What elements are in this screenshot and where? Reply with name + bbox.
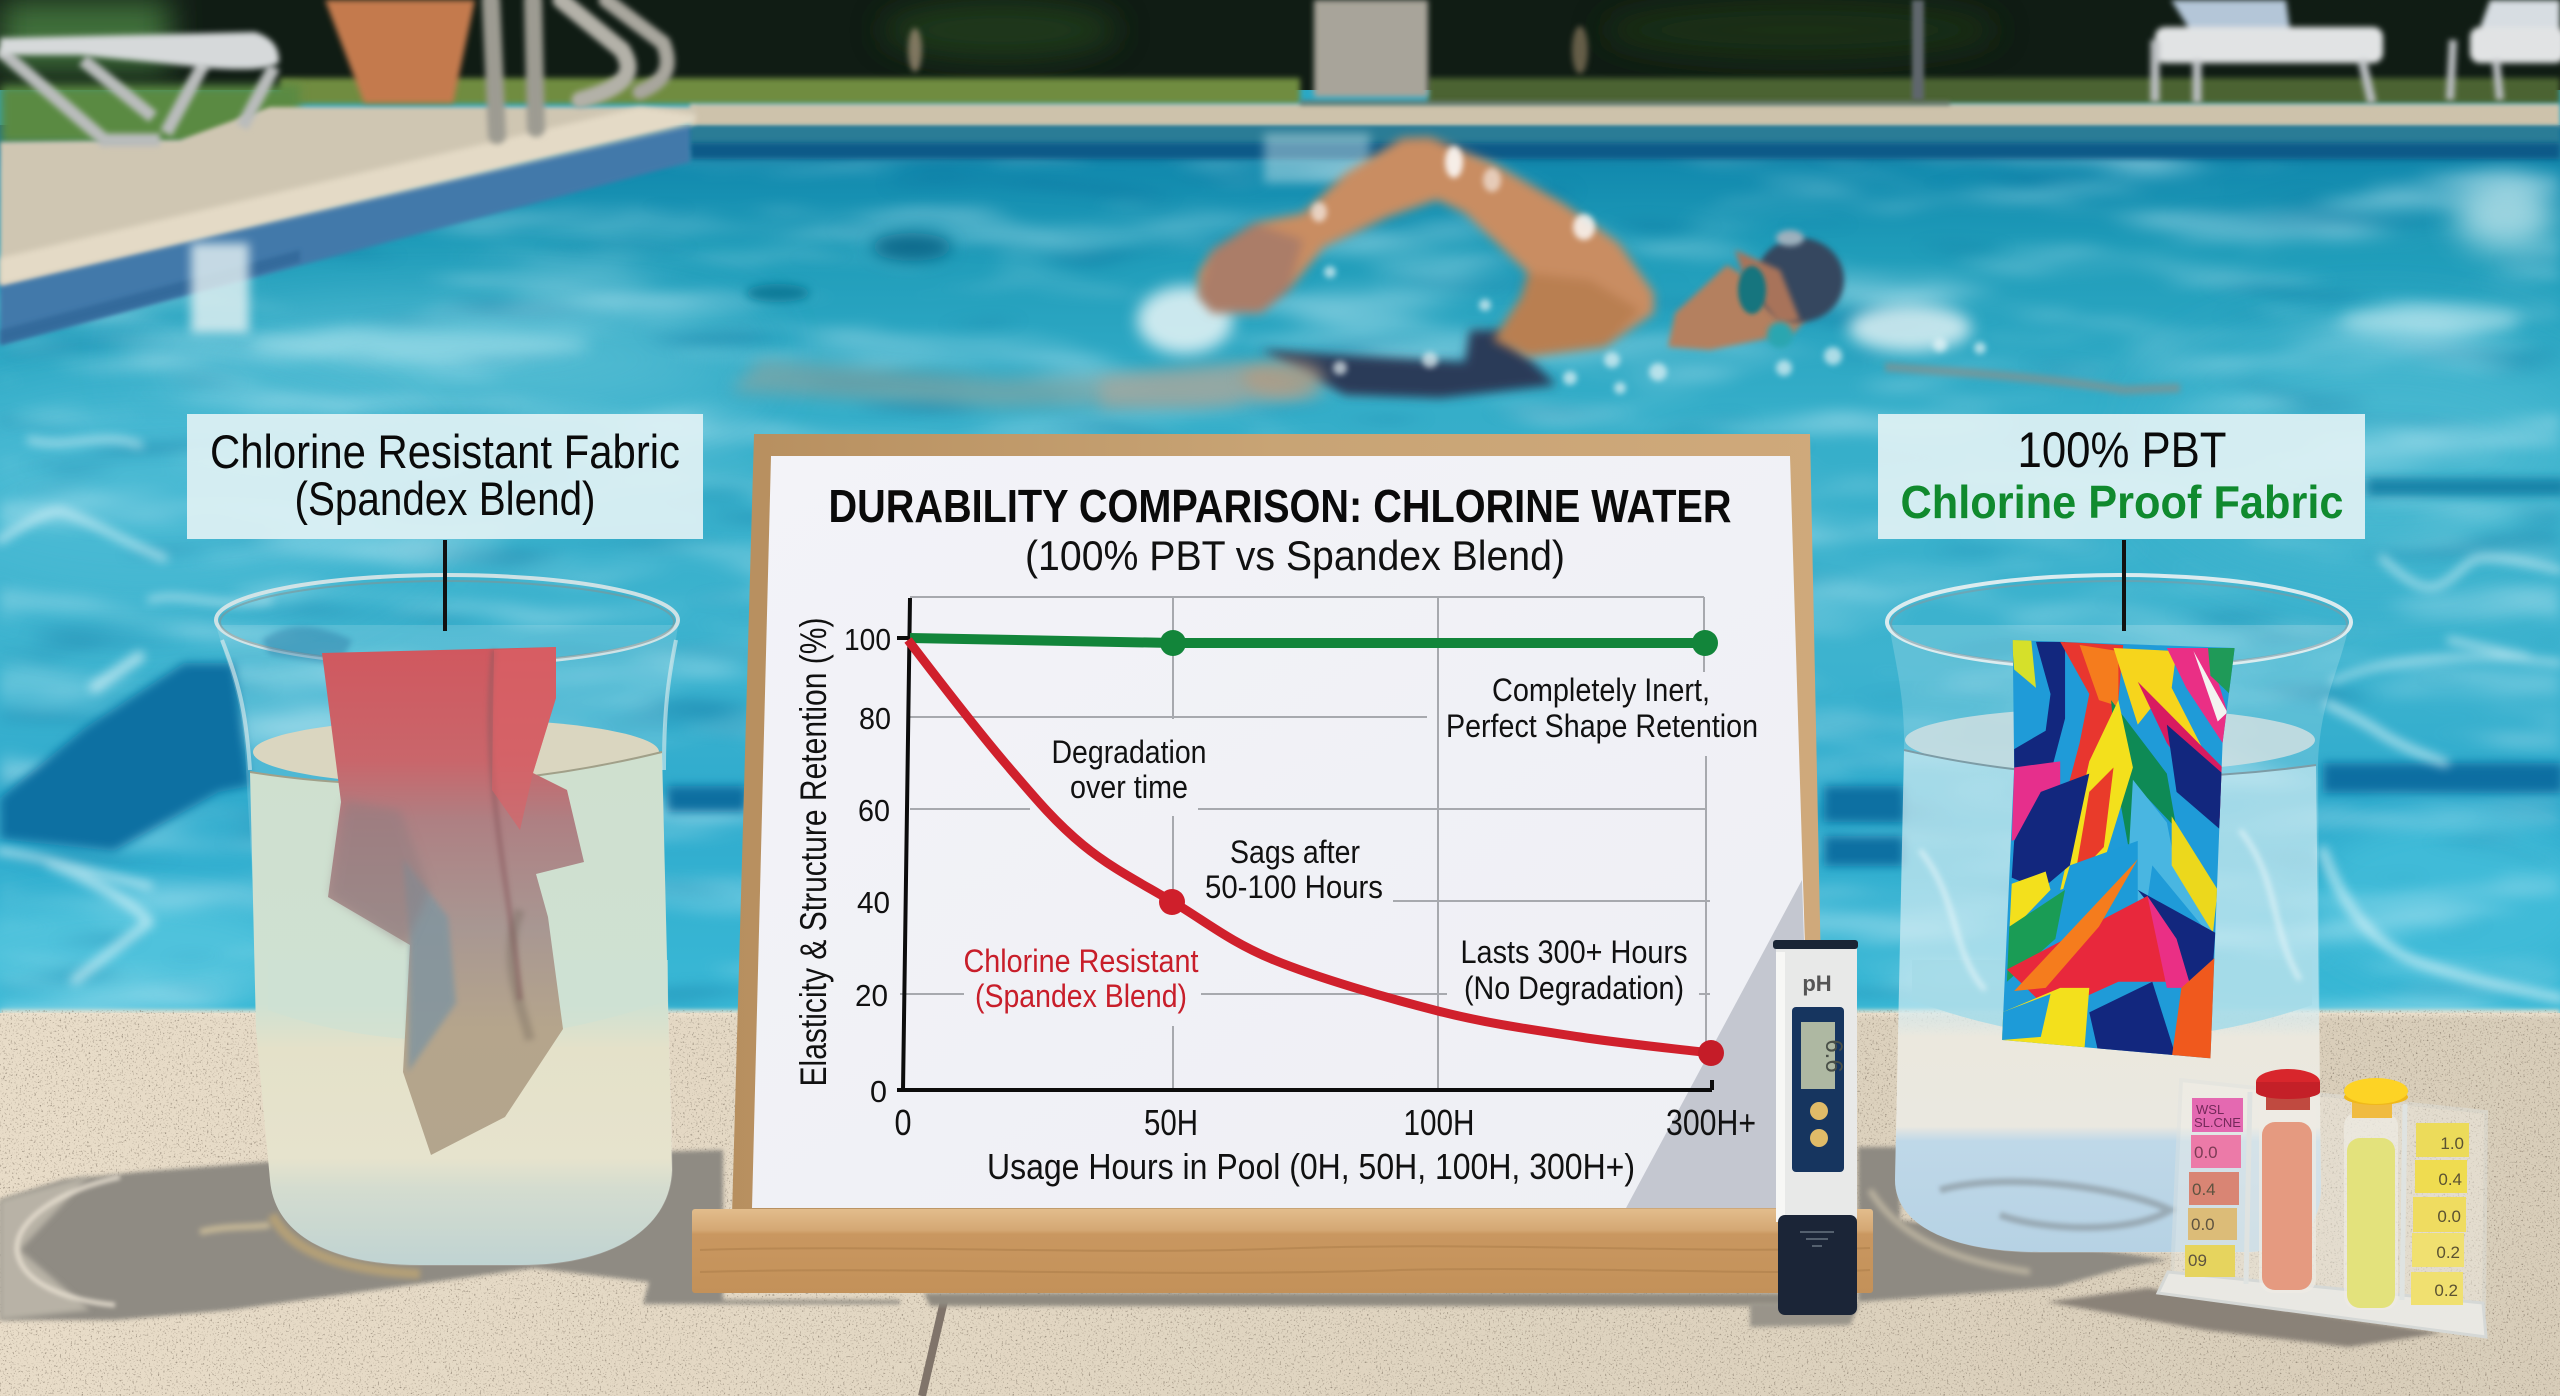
x-axis tick labels: 300H+ bbox=[1666, 1102, 1756, 1143]
callout: chlorine resistant fabric label: Chlorine Resistant Fabric bbox=[210, 425, 680, 478]
swimmer bbox=[730, 137, 2180, 408]
left beaker glass bbox=[216, 575, 678, 1266]
panel: right beaker with PBT fabric bbox=[1887, 540, 2351, 1253]
near pool deck edge and tile band bbox=[0, 107, 1370, 345]
gridlines bbox=[900, 597, 1710, 1090]
callout: chlorine resistant fabric label: (Spandex Blend) bbox=[294, 472, 596, 525]
annotation: chlorine resistant series label: Chlorine Resistant bbox=[964, 943, 1199, 979]
annotation: completely inert bbox=[1446, 672, 1758, 744]
x-axis tick labels: 100H bbox=[1404, 1102, 1474, 1143]
panel: wooden board with chart bbox=[692, 434, 1873, 1293]
wooden base bbox=[692, 1209, 1873, 1293]
annotation: lasts 300+ hours: Lasts 300+ Hours bbox=[1460, 934, 1688, 970]
callout line: left label to beaker bbox=[443, 540, 447, 631]
line chart bbox=[793, 597, 1758, 1187]
annotation: sags after 50-100 hours: Sags after bbox=[1230, 834, 1360, 870]
annotation: degradation over time bbox=[1052, 734, 1206, 805]
annotation: sags after 50-100 hours bbox=[1205, 834, 1383, 905]
x-axis tick labels: 50H bbox=[1144, 1102, 1198, 1143]
kit tray and frame bbox=[2158, 1080, 2486, 1337]
chart subtitle: (100% PBT vs Spandex Blend) bbox=[1025, 532, 1565, 579]
chart title: DURABILITY COMPARISON: CHLORINE WATER bbox=[828, 480, 1732, 532]
left colour swatches: SL.CNE bbox=[2194, 1115, 2241, 1130]
callout: 100% PBT chlorine proof fabric label: 100% PBT bbox=[2018, 422, 2226, 478]
y-axis title: Elasticity & Structure Retention (%) bbox=[793, 618, 834, 1086]
chart paper bbox=[752, 456, 1813, 1208]
right colour swatches: 0.2 bbox=[2434, 1281, 2458, 1300]
yellow reagent tube bbox=[2344, 1078, 2408, 1310]
y-axis tick labels: 40 bbox=[857, 885, 890, 920]
left colour swatches bbox=[2185, 1098, 2243, 1277]
left colour swatches: 0.0 bbox=[2194, 1143, 2218, 1162]
annotation: completely inert: Perfect Shape Retention bbox=[1446, 708, 1758, 744]
left colour swatches: 0.0 bbox=[2191, 1215, 2215, 1234]
right beaker glass bbox=[1887, 575, 2351, 1253]
y-axis tick labels bbox=[844, 622, 891, 1109]
annotation: sags after 50-100 hours: 50-100 Hours bbox=[1205, 869, 1383, 905]
x-axis tick labels bbox=[894, 1102, 1756, 1143]
y-axis tick labels: 100 bbox=[844, 622, 891, 657]
annotation: degradation over time: over time bbox=[1070, 769, 1188, 805]
axes bbox=[897, 598, 1712, 1090]
pool deck foreground bbox=[0, 1010, 2560, 1396]
right colour swatches: 1.0 bbox=[2440, 1134, 2464, 1153]
wooden frame bbox=[732, 434, 1826, 1215]
icon: faded fabric bbox=[322, 647, 584, 1155]
pool water background bbox=[0, 125, 2560, 1025]
series: chlorine resistant spandex blend bbox=[908, 640, 1724, 1066]
x-axis title: Usage Hours in Pool (0H, 50H, 100H, 300H+) bbox=[987, 1146, 1635, 1187]
annotation: chlorine resistant series label: (Spandex Blend) bbox=[975, 978, 1187, 1014]
callout: 100% PBT chlorine proof fabric label: Chlorine Proof Fabric bbox=[1900, 476, 2344, 528]
panel: left beaker with spandex blend fabric bbox=[216, 540, 678, 1266]
left colour swatches: WSL bbox=[2196, 1102, 2224, 1117]
callout line: right label to beaker bbox=[2122, 540, 2126, 631]
red reagent tube bbox=[2256, 1069, 2320, 1293]
right colour swatches: 0.0 bbox=[2437, 1207, 2461, 1226]
background garden and far pool edge bbox=[0, 0, 2560, 159]
left colour swatches: 0.4 bbox=[2192, 1180, 2216, 1199]
annotation: degradation over time: Degradation bbox=[1052, 734, 1206, 770]
y-axis tick labels: 80 bbox=[859, 701, 891, 736]
right colour swatches: 0.4 bbox=[2438, 1170, 2462, 1189]
annotation: lasts 300+ hours bbox=[1460, 934, 1688, 1006]
right colour swatches: 0.2 bbox=[2436, 1243, 2460, 1262]
callout: chlorine resistant fabric label bbox=[187, 414, 703, 539]
y-axis tick labels: 0 bbox=[870, 1074, 887, 1109]
icon: vibrant fabric swatch bbox=[2002, 640, 2235, 1058]
background furniture: lounger, plant pot, ladder, post and chairs bbox=[0, 0, 2560, 143]
annotation: chlorine resistant series label bbox=[964, 943, 1199, 1014]
icon: pool water test kit bbox=[2158, 1069, 2486, 1337]
callout: 100% PBT chlorine proof fabric label bbox=[1878, 414, 2365, 539]
y-axis tick labels: 60 bbox=[858, 793, 890, 828]
x-axis tick labels: 0 bbox=[894, 1102, 912, 1143]
right colour swatches bbox=[2411, 1123, 2469, 1305]
y-axis tick labels: 20 bbox=[855, 978, 888, 1013]
annotation: completely inert: Completely Inert, bbox=[1492, 672, 1710, 708]
series: chlorine proof PBT bbox=[910, 630, 1718, 656]
icon: pH meter bbox=[1773, 940, 1858, 1315]
left colour swatches: 09 bbox=[2188, 1251, 2207, 1270]
icon: pH meter: 6.6 bbox=[1820, 1039, 1847, 1073]
icon: pH meter: pH bbox=[1802, 971, 1832, 996]
annotation: lasts 300+ hours: (No Degradation) bbox=[1464, 970, 1684, 1006]
